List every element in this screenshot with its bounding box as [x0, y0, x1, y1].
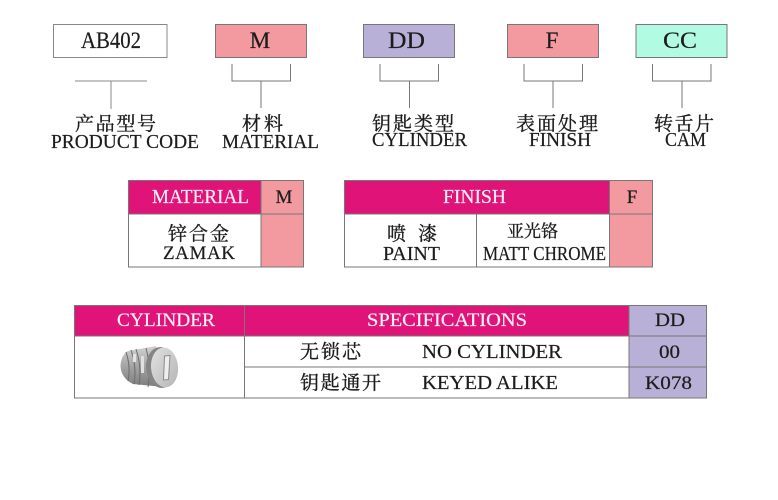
- connector: product code: [75, 81, 147, 109]
- row: no cylinder: NO CYLINDER: [422, 342, 562, 363]
- connector: material: [232, 64, 290, 108]
- label: product code: 产品型号: [75, 113, 156, 135]
- label: material: MATERIAL: [222, 131, 319, 153]
- code box: AB402: [54, 24, 167, 58]
- cell: matt chrome: 亚光铬: [507, 222, 558, 241]
- cell: matt chrome: MATT CHROME: [483, 243, 606, 265]
- header: finish: FINISH: [443, 186, 506, 208]
- label: cylinder: [372, 113, 468, 151]
- label: finish: [516, 113, 598, 151]
- cell: zamak: ZAMAK: [163, 243, 235, 264]
- cell: matt chrome: [483, 222, 606, 265]
- label: finish: 表面处理: [516, 113, 598, 135]
- label: product code: PRODUCT CODE: [51, 131, 199, 153]
- code box: F: F: [546, 28, 558, 53]
- row: keyed alike: KEYED ALIKE: [422, 373, 558, 394]
- icon: lock cylinder: [120, 346, 180, 389]
- table: material: [128, 180, 304, 267]
- cell: zamak: 锌合金: [168, 223, 229, 245]
- label: material: 材料: [242, 113, 283, 135]
- code: K078: K078: [645, 373, 692, 394]
- code: DD: DD: [655, 310, 685, 331]
- code box: CC: [636, 24, 727, 58]
- code box: DD: [364, 24, 454, 58]
- label: material: [222, 113, 319, 153]
- row: keyed alike: [300, 372, 692, 394]
- code: M: M: [276, 187, 293, 208]
- code box: M: [216, 24, 306, 58]
- code: F: F: [627, 187, 637, 208]
- cell: paint: PAINT: [383, 243, 440, 265]
- code: 00: 00: [659, 342, 680, 363]
- label: cam: 转舌片: [654, 113, 714, 135]
- row: no cylinder: [300, 341, 680, 363]
- cell: zamak: [163, 223, 235, 264]
- label: cam: CAM: [665, 129, 706, 151]
- connector: cylinder: [380, 64, 438, 108]
- header: specifications: SPECIFICATIONS: [367, 310, 527, 331]
- row: no cylinder: 无锁芯: [300, 341, 362, 363]
- label: product code: [51, 113, 199, 153]
- code box: DD: DD: [388, 28, 425, 53]
- label: cam: [654, 113, 714, 151]
- connector: cam: [652, 64, 711, 108]
- label: finish: FINISH: [529, 129, 591, 151]
- table: cylinder specifications: [74, 306, 707, 398]
- code box: F: [508, 24, 598, 58]
- cell: paint: 喷: [387, 223, 406, 245]
- label: cylinder: 钥匙类型: [372, 113, 454, 135]
- cell: paint: 漆: [418, 223, 437, 245]
- code box: CC: CC: [663, 28, 697, 53]
- row: keyed alike: 钥匙通开: [300, 372, 381, 394]
- cell: paint: [383, 223, 440, 265]
- table: finish: [344, 180, 653, 267]
- header: material: MATERIAL: [152, 186, 249, 208]
- code box: M: M: [250, 28, 270, 53]
- code box: AB402: AB402: [81, 28, 141, 53]
- connector: finish: [524, 64, 582, 108]
- label: cylinder: CYLINDER: [372, 129, 468, 151]
- header: cylinder: CYLINDER: [117, 310, 215, 331]
